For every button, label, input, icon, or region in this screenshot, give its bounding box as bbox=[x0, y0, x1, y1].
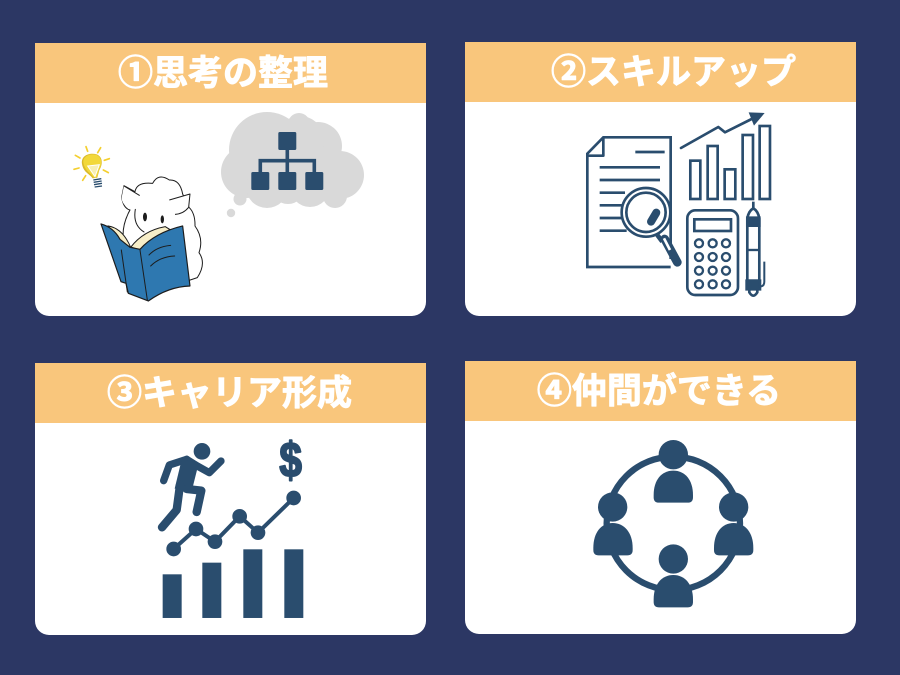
header band 3 bbox=[35, 363, 426, 423]
illustration: sheep reading a book bbox=[101, 177, 202, 301]
heading 3: ③キャリア形成 bbox=[107, 374, 352, 413]
icon: thought cloud with org chart bbox=[221, 112, 364, 217]
icon: runner on rising graph with dollar bbox=[162, 432, 303, 618]
panel: thinking organisation bbox=[35, 43, 426, 316]
sheep ears and face bbox=[122, 186, 140, 208]
header band 4 bbox=[465, 361, 856, 421]
person right bbox=[714, 492, 753, 555]
book bbox=[108, 226, 173, 250]
pen bbox=[747, 202, 764, 296]
dollar sign: $ bbox=[279, 432, 302, 488]
heading 2: ②スキルアップ bbox=[551, 53, 796, 92]
line graph bbox=[166, 491, 301, 556]
bars bbox=[163, 549, 303, 618]
card background 2 bbox=[465, 42, 856, 316]
runner bbox=[162, 443, 221, 527]
panel: making friends bbox=[465, 361, 856, 634]
rising chart bbox=[681, 112, 770, 199]
header band 1 bbox=[35, 43, 426, 103]
person left bbox=[593, 492, 633, 555]
panel: career building bbox=[35, 363, 426, 635]
card background 1 bbox=[35, 43, 426, 316]
panel: skill up bbox=[465, 42, 856, 316]
icon: four people in a circle bbox=[593, 440, 753, 607]
heading 1: ①思考の整理 bbox=[118, 54, 328, 93]
calculator bbox=[687, 210, 738, 295]
icon: light bulb bbox=[74, 147, 109, 187]
icon: document, magnifier, chart, calculator and pen bbox=[587, 112, 770, 296]
card background 3 bbox=[35, 363, 426, 635]
sheep wool bbox=[122, 177, 202, 287]
person top bbox=[654, 440, 693, 503]
card background 4 bbox=[465, 361, 856, 634]
heading 4: ④仲間ができる bbox=[537, 372, 781, 411]
magnifier bbox=[622, 188, 677, 262]
connecting ring bbox=[607, 457, 740, 590]
person bottom bbox=[654, 544, 693, 607]
header band 2 bbox=[465, 42, 856, 102]
document bbox=[587, 137, 671, 267]
